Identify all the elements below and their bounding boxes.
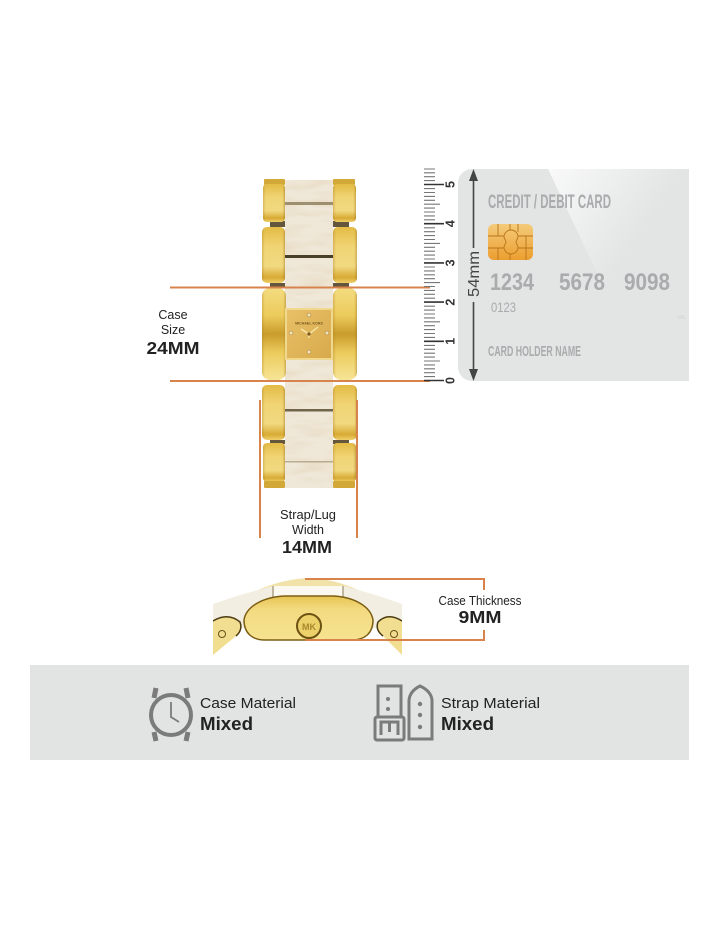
label: strap/lug width: 14MM <box>282 537 332 557</box>
link shadows <box>270 221 349 444</box>
label: strap/lug width: Width <box>292 523 324 537</box>
text: strap material <box>441 696 540 734</box>
ruler numbers: 3 <box>444 259 458 266</box>
text: case material <box>200 696 296 734</box>
ruler numbers: 0 <box>444 377 458 384</box>
label: case thickness: 9MM <box>458 607 502 627</box>
card holder name: CARD HOLDER NAME <box>488 343 581 360</box>
card chip <box>488 224 533 260</box>
left lug <box>213 617 241 655</box>
ruler numbers: 4 <box>444 220 458 227</box>
card number <box>490 269 670 296</box>
watch dial: MICHAEL KORS <box>295 322 323 326</box>
icon: strap and buckle <box>375 686 432 740</box>
label: case thickness: Case Thickness <box>438 594 522 608</box>
ruler numbers: 5 <box>444 181 458 188</box>
label: case size: Case <box>158 308 188 322</box>
label: strap/lug width: Strap/Lug <box>280 508 336 522</box>
watch front view <box>262 179 357 488</box>
54mm dimension arrow <box>466 169 483 381</box>
label: case thickness <box>438 594 522 627</box>
ruler numbers: 1 <box>444 338 458 345</box>
case back <box>244 596 373 640</box>
right bracelet links <box>333 179 357 488</box>
card number: 9098 <box>624 269 670 296</box>
text: strap material: Mixed <box>441 714 494 734</box>
marble bracelet side <box>213 586 402 628</box>
card number: 5678 <box>559 269 605 296</box>
card number: 1234 <box>490 269 535 296</box>
label: strap/lug width <box>280 508 336 557</box>
watch dial <box>285 308 333 360</box>
centre marble bracelet <box>285 180 333 488</box>
54mm dimension arrow: 54mm <box>466 251 483 297</box>
panel: materials band <box>30 665 689 760</box>
case size measurement lines <box>170 288 430 381</box>
card valid text: VAL <box>677 315 686 321</box>
credit card <box>458 169 689 381</box>
watch side view <box>213 578 402 655</box>
ruler <box>424 169 458 384</box>
card small number: 0123 <box>491 299 516 315</box>
label: case size: Size <box>161 323 185 337</box>
text: case material: Mixed <box>200 714 253 734</box>
text: strap material: Strap Material <box>441 696 540 712</box>
right lug <box>377 617 402 655</box>
crown <box>297 614 321 638</box>
label: case size <box>146 308 200 358</box>
ruler numbers: 2 <box>444 299 458 306</box>
card glare <box>548 169 689 381</box>
top crescent <box>258 578 358 590</box>
ruler numbers <box>444 181 458 384</box>
text: case material: Case Material <box>200 696 296 712</box>
strap width bracket lines <box>260 400 357 538</box>
case thickness bracket <box>305 579 484 640</box>
card title: CREDIT / DEBIT CARD <box>488 192 611 213</box>
left bracelet links <box>262 179 286 488</box>
label: case size: 24MM <box>146 338 200 358</box>
crown: MK <box>302 622 316 632</box>
icon: watch <box>151 688 191 741</box>
